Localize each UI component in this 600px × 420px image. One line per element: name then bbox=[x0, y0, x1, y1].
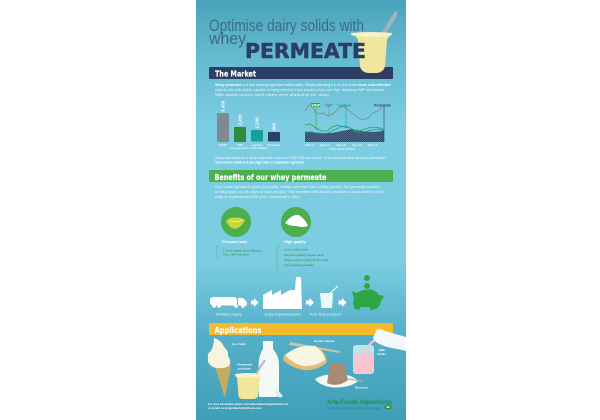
application: chocolate dessert bbox=[315, 363, 368, 390]
icon: factory bbox=[263, 277, 302, 309]
market intro text: Milk solids prices have been very attractive for dairy. bbox=[215, 93, 330, 97]
application: cream cheese toast bbox=[283, 339, 340, 370]
icon: powder heap bbox=[281, 207, 311, 237]
application: fermented products: products bbox=[238, 366, 251, 370]
application: milk bottle bbox=[258, 341, 283, 398]
chart legend: Lactose bbox=[338, 103, 351, 107]
title: whey bbox=[208, 29, 246, 48]
bar: SMP: 2,200 bbox=[238, 114, 242, 126]
title bbox=[208, 16, 366, 63]
section bar: Benefits: Benefits of our whey permeate bbox=[214, 173, 326, 182]
benefit: pleasant taste: Pleasant taste bbox=[222, 240, 248, 244]
benefit: high quality: Single source of supply, all milk solids bbox=[284, 258, 328, 262]
benefits intro text: way, a replacement for you, consumer's diet. bbox=[215, 195, 300, 199]
icon: glass with spoon bbox=[320, 286, 338, 308]
market footnote: *Saves more solids in a beverage than a comparable ingredient. bbox=[215, 160, 305, 164]
arrow bbox=[306, 298, 314, 307]
process flow: Easy implementation bbox=[265, 312, 301, 316]
application: fermented products: Fermented bbox=[237, 362, 253, 366]
bar: Lactose: 1,100 bbox=[254, 117, 260, 128]
bar: SMP bbox=[234, 114, 246, 147]
benefit: high quality: Consistent quality, all year round bbox=[284, 253, 324, 257]
application: milk drink glass bbox=[353, 329, 406, 374]
section bar: Benefits bbox=[209, 170, 393, 182]
arrow bbox=[251, 298, 258, 307]
benefit: pleasant taste bbox=[217, 207, 262, 258]
bar: Permeate: Permeate bbox=[267, 143, 281, 147]
disclaimer: or contact us at ingredients@arlafoods.com bbox=[208, 406, 261, 410]
title: PERMEATE bbox=[245, 39, 366, 63]
benefits intro text bbox=[215, 185, 385, 199]
process flow: Reliable supply bbox=[216, 312, 242, 316]
bar: Permeate bbox=[267, 122, 281, 147]
benefit: high quality: Free-flowing powder bbox=[284, 263, 314, 267]
section bar: Applications bbox=[209, 323, 393, 335]
bar: Permeate: 900 bbox=[272, 122, 276, 130]
line chart: price trends: Mar-15 bbox=[336, 143, 346, 147]
benefits intro text: Arla Foods Ingredients gives you quality, nutrition and taste from a whey product. Our permeate provides bbox=[215, 185, 380, 189]
market footnote: Whey permeate is a dairy solid with a price of USD 900 per tonne. It is in the industry as whey permeate* bbox=[215, 156, 387, 160]
disclaimer: For more information please visit www.arlafoodsingredients.com bbox=[208, 402, 288, 406]
bar: WMP: 3,450 bbox=[220, 100, 226, 112]
bar: Lactose bbox=[251, 117, 263, 147]
icon: lips bbox=[221, 207, 251, 237]
background panel bbox=[196, 0, 406, 420]
benefit: high quality bbox=[277, 207, 328, 267]
bar: SMP: SMP bbox=[237, 143, 243, 147]
chart legend: Permeate bbox=[374, 103, 391, 107]
market footnote bbox=[215, 156, 387, 164]
application: milk drink glass: drinks bbox=[377, 352, 386, 356]
section bar: The Market bbox=[209, 67, 393, 79]
section bar: Applications: Applications bbox=[214, 326, 262, 335]
logo: Arla Foods Ingredients: Arla Foods Ingredients bbox=[327, 399, 393, 406]
process flow bbox=[210, 275, 384, 316]
bar chart: price comparison bbox=[217, 100, 281, 150]
arrow bbox=[338, 298, 346, 307]
line chart: price trends: Mar-14 bbox=[305, 143, 315, 147]
line chart: price trends bbox=[305, 103, 391, 151]
line chart: price trends: Sep-15 bbox=[352, 143, 362, 147]
bar: Lactose: Lactose bbox=[252, 143, 263, 147]
chart legend: WMP bbox=[312, 103, 321, 107]
icon: yogurt pot with spoon bbox=[351, 11, 397, 73]
market intro text: Whey permeate is a fast-moving ingredient within dairy. Simply blending it in is one of the most cost-effective bbox=[215, 83, 391, 87]
disclaimer bbox=[208, 402, 288, 410]
benefit: high quality: High quality bbox=[284, 240, 307, 244]
logo: Arla Foods Ingredients bbox=[327, 399, 393, 410]
application: ice cream: Ice cream bbox=[232, 342, 246, 346]
line chart: price trends: Mar-16 bbox=[368, 143, 378, 147]
bar: WMP bbox=[217, 100, 229, 147]
icon: milk truck bbox=[210, 297, 247, 308]
line chart: price trends: Sep-14 bbox=[320, 143, 330, 147]
chart legend bbox=[311, 103, 391, 107]
market intro text bbox=[215, 83, 391, 97]
benefits intro text: a milky taste, no off-notes in your product. The excellent milk flavour provides a clean taste in every bbox=[215, 190, 385, 194]
market intro text: ways to add milk solids, capable of being blended when powder prices are high, replacing SMP and lactose. bbox=[215, 88, 385, 92]
line chart: price trends: Price trend (USD/t) bbox=[329, 147, 355, 151]
icon: piggy bank with coins bbox=[352, 275, 384, 310]
bar chart: price comparison: Average price, 2015 (USD/t) bbox=[230, 146, 268, 150]
application: fermented products bbox=[235, 360, 265, 399]
title: Optimise dairy solids with bbox=[209, 16, 364, 35]
benefit: high quality: Low salt levels bbox=[284, 248, 309, 252]
benefit: pleasant taste: No off-notes bbox=[223, 252, 250, 256]
application: ice cream bbox=[208, 338, 246, 398]
logo: Arla Foods Ingredients: Discovering the wonders of whey bbox=[327, 406, 381, 410]
process flow: Your final product bbox=[309, 312, 341, 316]
section bar: The Market: The Market bbox=[215, 70, 256, 78]
application: chocolate dessert: Desserts bbox=[355, 386, 368, 390]
chart legend: SMP bbox=[325, 103, 333, 107]
benefit: pleasant taste: Clean taste and flavour bbox=[223, 248, 262, 252]
application: milk drink glass: Milk bbox=[379, 348, 385, 352]
bar: WMP: WMP bbox=[219, 143, 227, 147]
application: cream cheese toast: Cream cheese bbox=[314, 339, 335, 343]
